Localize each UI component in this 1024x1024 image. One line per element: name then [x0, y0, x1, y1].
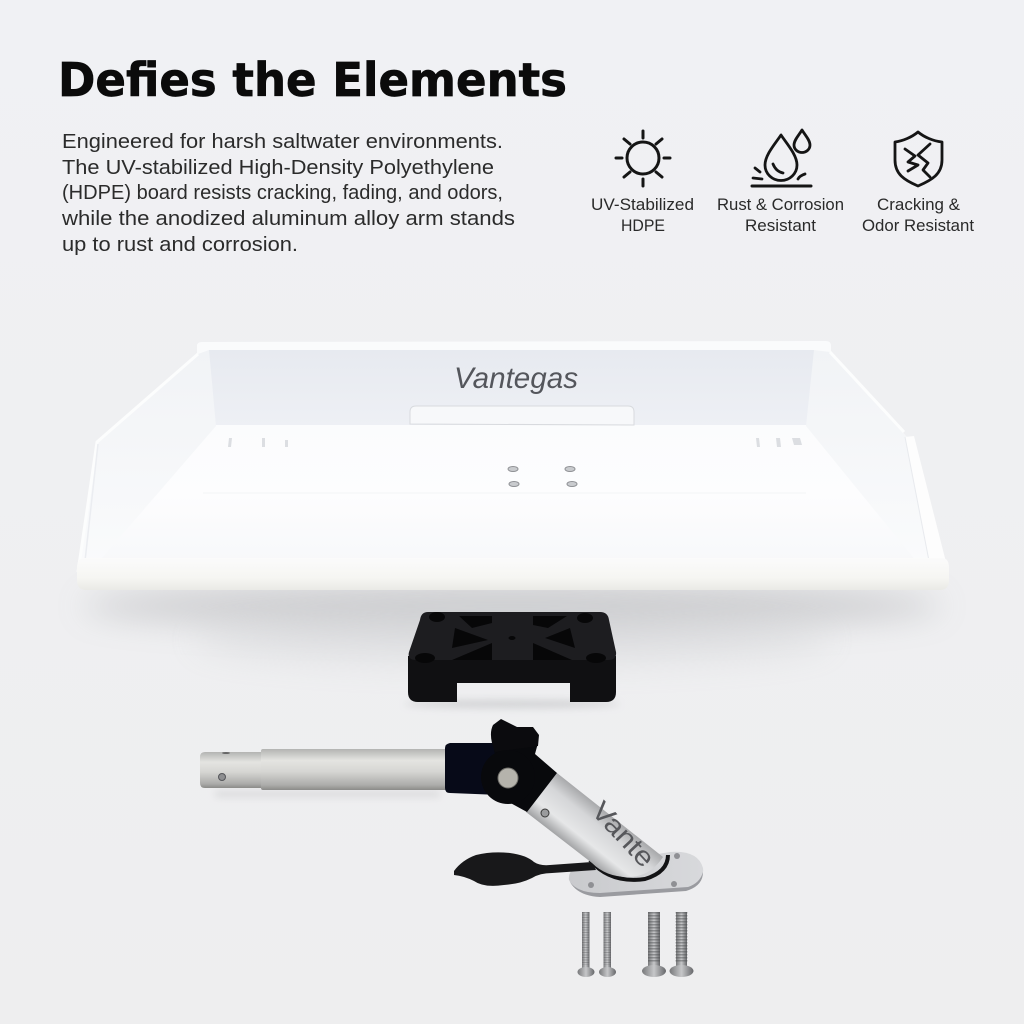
- label: UV-stabilized HDPE: UV-Stabilized: [591, 196, 694, 214]
- rubber cap with strap: [454, 852, 596, 886]
- label: UV-stabilized HDPE: HDPE: [621, 217, 665, 235]
- description text: Engineered for harsh saltwater environments.: [62, 130, 503, 153]
- black pivot housing: [445, 719, 557, 812]
- back wall: [197, 341, 831, 428]
- pin holes: [218, 752, 230, 780]
- right wall: [806, 350, 947, 566]
- deck flange: [569, 852, 703, 897]
- floor mounting holes: [508, 466, 577, 486]
- label: rust and corrosion resistant: Rust & Corrosion: [717, 196, 844, 214]
- white HDPE bait board: [77, 341, 949, 590]
- label: cracking and odor resistant: Cracking &: [877, 196, 960, 214]
- mounting screws: [578, 912, 694, 977]
- thick tube: [261, 749, 447, 790]
- label: UV-stabilized HDPE: [591, 196, 694, 235]
- black mounting bracket: [404, 612, 620, 708]
- arm shadow: [215, 791, 440, 797]
- floor inner panel line: [203, 492, 806, 494]
- left wall: [78, 350, 216, 572]
- bracket top face: [409, 612, 616, 660]
- wing knob: [491, 719, 539, 752]
- brand text on tube: Vante: [586, 796, 661, 873]
- label: rust and corrosion resistant: [717, 196, 844, 235]
- angled socket: [494, 743, 557, 812]
- label: cracking and odor resistant: Odor Resistant: [862, 217, 974, 235]
- bracket front face: [408, 656, 616, 702]
- front lip: [77, 558, 949, 590]
- pivot bolt: [498, 768, 518, 788]
- handle slot: [410, 406, 634, 425]
- tube set screw: [541, 809, 549, 817]
- icon: water drops: [752, 130, 811, 186]
- angled tube: [526, 773, 663, 877]
- floor: [95, 425, 920, 565]
- floor slots: [228, 438, 802, 447]
- title: Defies the Elements: [58, 53, 567, 107]
- bracket ribs and holes: [415, 612, 606, 663]
- brand name on back wall: Vantegas: [454, 362, 578, 395]
- adjustable aluminum arm: [200, 719, 703, 977]
- tray drop shadow: [82, 582, 942, 666]
- round knob: [481, 750, 535, 804]
- label: rust and corrosion resistant: Resistant: [745, 217, 816, 235]
- icon: sun: [616, 131, 670, 186]
- feature: cracking and odor resistant: [862, 132, 974, 235]
- description text: while the anodized aluminum alloy arm stands: [61, 207, 515, 230]
- description text: The UV-stabilized High-Density Polyethylene: [62, 156, 494, 179]
- description text: [61, 130, 515, 256]
- thin tube end: [200, 752, 262, 788]
- label: cracking and odor resistant: [862, 196, 974, 235]
- bracket shadow: [404, 700, 620, 708]
- feature: UV-stabilized HDPE: [591, 131, 694, 235]
- icon: cracked shield: [895, 132, 942, 186]
- description text: (HDPE) board resists cracking, fading, and odors,: [62, 181, 503, 204]
- description text: up to rust and corrosion.: [62, 233, 298, 256]
- feature: rust and corrosion resistant: [717, 130, 844, 235]
- collar: [445, 743, 500, 795]
